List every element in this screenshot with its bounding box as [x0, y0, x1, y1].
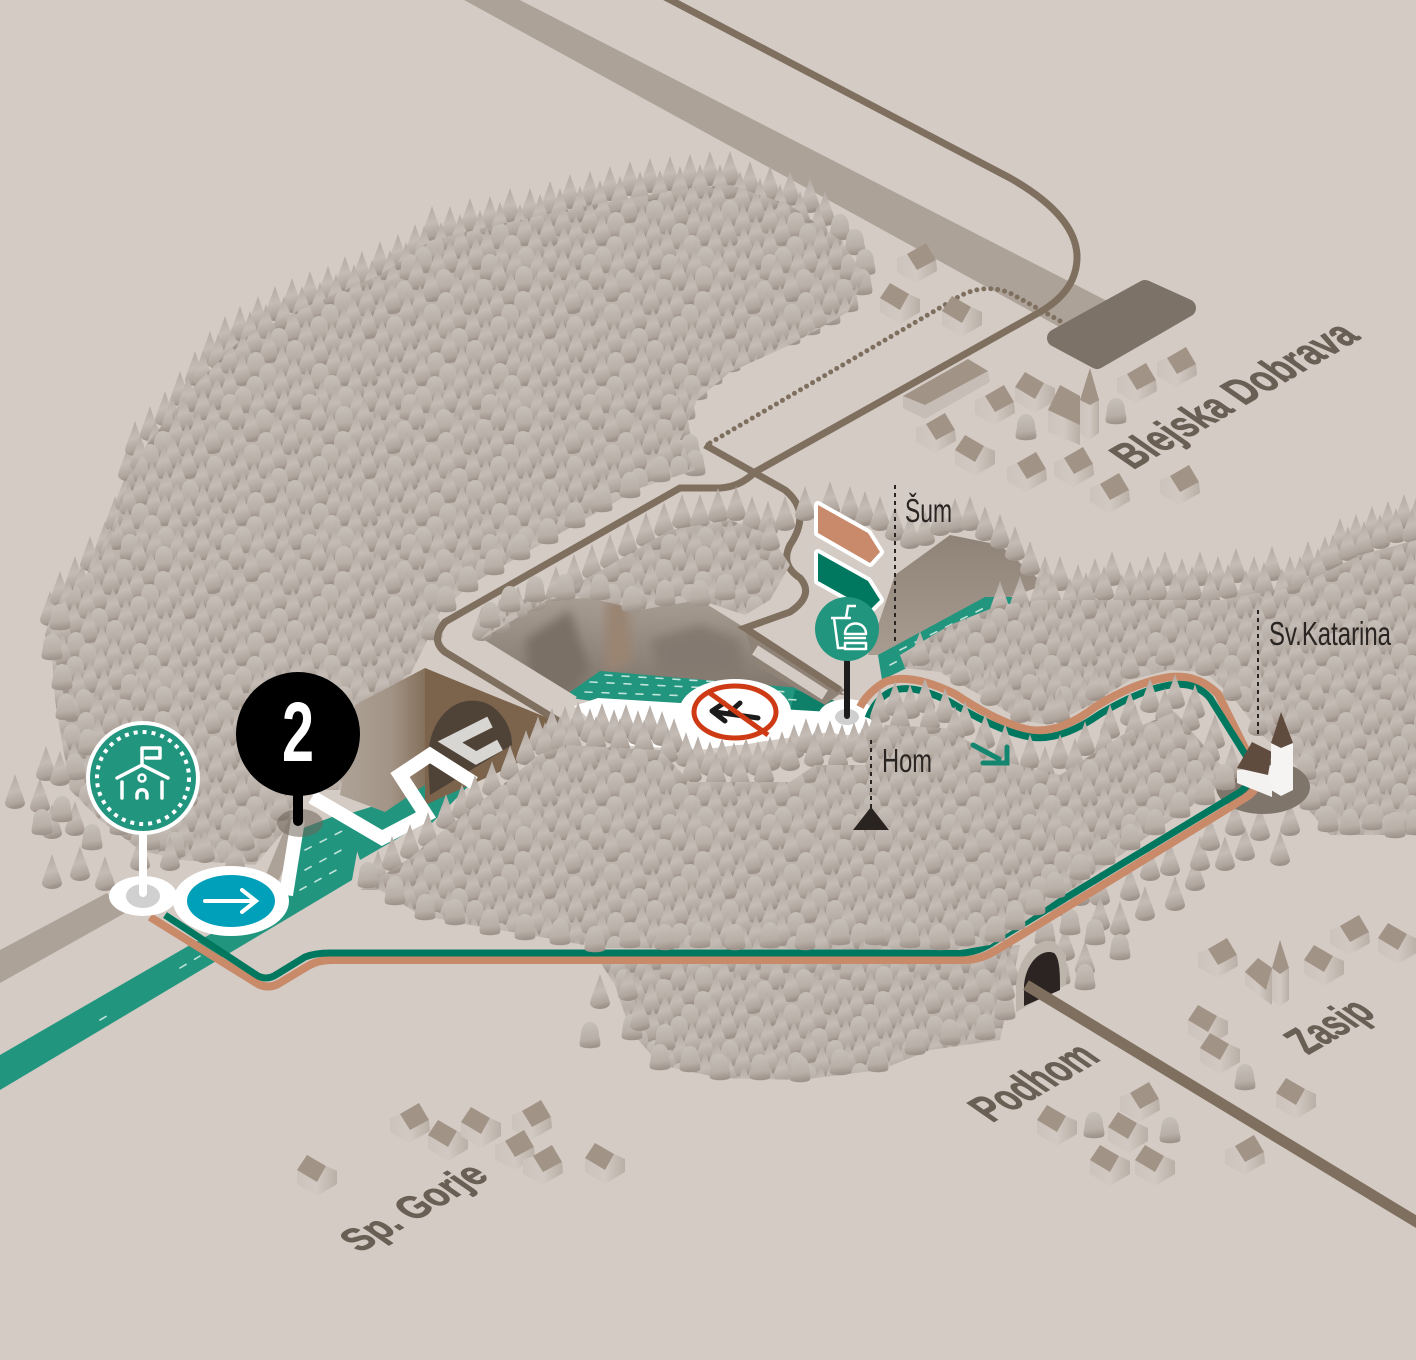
bridge: east deck: [745, 628, 850, 705]
icon: school: [117, 748, 168, 798]
houses: Blejska Dobrava: [880, 243, 1200, 513]
car park: [1056, 289, 1187, 360]
bridge: main road deck: [450, 634, 570, 708]
icon: food and drink: [815, 597, 879, 661]
route number pin: [236, 672, 360, 837]
signpost arrow: green: [818, 553, 880, 610]
tunnel: Podhom: [1016, 941, 1066, 1012]
houses: Sp. Gorje: [297, 1100, 625, 1196]
river: gorge sections: [345, 597, 1017, 860]
road redraw over bridge: [438, 622, 565, 725]
label: Hom: [853, 740, 932, 830]
direction arrow on trail: [973, 745, 1007, 763]
path inside tunnel: [450, 722, 500, 758]
no walking sign: [679, 679, 791, 745]
river: south-west section: [0, 812, 362, 1090]
trail: green: [165, 684, 1252, 978]
label: Sv.Katarina: [1258, 610, 1391, 735]
tunnel arch: [428, 701, 512, 795]
central gorge cliffs: [468, 595, 845, 697]
church: Sv. Katarina: [1237, 712, 1293, 797]
forest: trees near Šum: [770, 515, 1045, 590]
label: Šum: Šum: [905, 492, 952, 529]
forest: east above trail: [900, 528, 1416, 838]
route number pin: 2: [282, 685, 314, 779]
wide road south-west: [0, 893, 125, 983]
label: Sp. Gorje: Sp. Gorje: [329, 1156, 498, 1258]
white path band: [574, 698, 860, 750]
dotted rail line: [710, 289, 1062, 443]
forest: front main block: [360, 708, 1232, 952]
forest: north-west: [15, 185, 865, 890]
label: Podhom: Podhom: [958, 1036, 1111, 1129]
white walking path zigzag: [312, 755, 474, 838]
right gorge cliffs: [868, 535, 1045, 655]
houses: Zasip and Podhom: [1037, 915, 1416, 1186]
left gorge cliff: [340, 668, 565, 812]
icon: school window: [138, 774, 146, 782]
forest: south-east scatter: [1045, 810, 1290, 990]
side road below pin: [268, 820, 296, 888]
wide road north: [455, 0, 1115, 330]
main road: [438, 0, 1077, 725]
trail: orange: [150, 677, 1258, 986]
church ground: [1216, 760, 1310, 814]
label: Hom: Hom: [882, 742, 932, 779]
secondary road: [705, 445, 840, 690]
white path to pin: [286, 820, 298, 895]
forest: central block: [480, 520, 790, 640]
river: flow dashes: [100, 605, 990, 1020]
forest: south patch: [590, 945, 1020, 1082]
signpost base: [818, 655, 876, 735]
school marker: [86, 721, 200, 916]
signpost arrow: orange: [818, 505, 880, 563]
road: Podhom: [1026, 985, 1416, 1224]
start arrow marker: [173, 866, 289, 936]
